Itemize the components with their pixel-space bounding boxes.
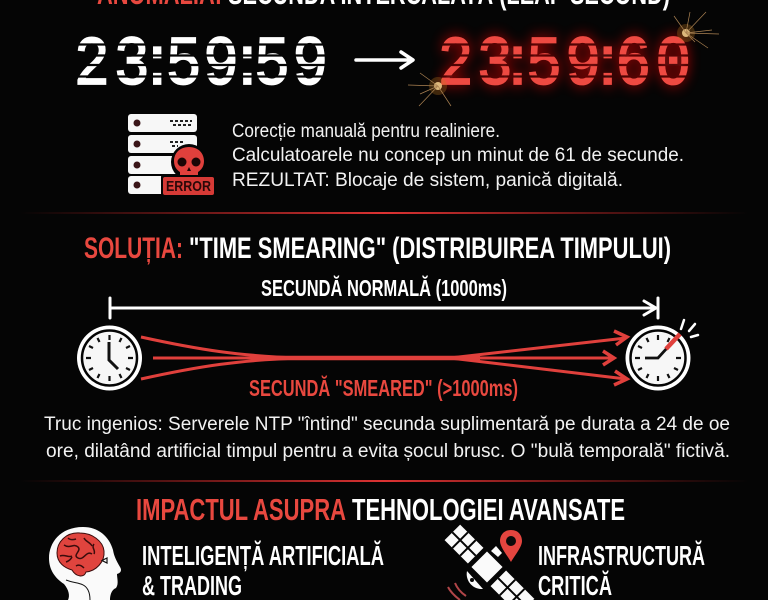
- arrows: smeared second: [141, 331, 627, 385]
- text block: anomaly explanation: Calculatoarele nu concep un minut de 61 de secunde.: [232, 145, 684, 166]
- icon: left clock: [77, 326, 142, 390]
- white digital clock 23:59:59: 23:59:59: [74, 26, 328, 106]
- red digital clock 23:59:60: 23:59:60: [438, 26, 691, 106]
- text block: anomaly explanation: REZULTAT: Blocaje de sistem, panică digitală.: [232, 170, 623, 191]
- title: anomaly heading: [97, 0, 670, 11]
- sparks top right: [674, 12, 719, 48]
- arrow: normal second span: [110, 298, 658, 318]
- label: AI and trading: [142, 540, 384, 600]
- text block: anomaly explanation: Corecție manuală pentru realiniere.: [232, 121, 500, 142]
- heading: impact: TEHNOLOGIEI AVANSATE: [352, 492, 625, 527]
- label: critical infrastructure: [538, 540, 705, 600]
- icon: head with brain: [49, 527, 121, 600]
- heading: impact: IMPACTUL ASUPRA: [136, 492, 346, 527]
- icon: right clock: [626, 320, 698, 390]
- arrow between clocks: [356, 52, 413, 68]
- text block: time smearing explanation: ore, dilatând artificial timpul pentru a evita șocul brusc. O "bulă temporală" fictivă.: [46, 441, 730, 462]
- icon: server error: ERROR: [166, 178, 211, 195]
- red digital clock 23:59:60: 23:59:60: [438, 26, 691, 106]
- heading: solution: SOLUȚIA:: [84, 232, 183, 265]
- text block: anomaly explanation: [232, 121, 684, 191]
- text block: time smearing explanation: [44, 414, 730, 462]
- label: AI and trading: INTELIGENȚĂ ARTIFICIALĂ: [142, 540, 384, 571]
- icon: satellite: [445, 525, 534, 600]
- heading: impact: [136, 492, 625, 527]
- sparks bottom left: [408, 73, 451, 106]
- label: smeared second: SECUNDĂ "SMEARED" (>1000ms): [249, 374, 518, 401]
- icon: server error: [128, 114, 216, 196]
- label: normal second: SECUNDĂ NORMALĂ (1000ms): [261, 274, 507, 301]
- text block: time smearing explanation: Truc ingenios: Serverele NTP "întind" secunda suplimentară pe durata a 24 de oe: [44, 414, 730, 435]
